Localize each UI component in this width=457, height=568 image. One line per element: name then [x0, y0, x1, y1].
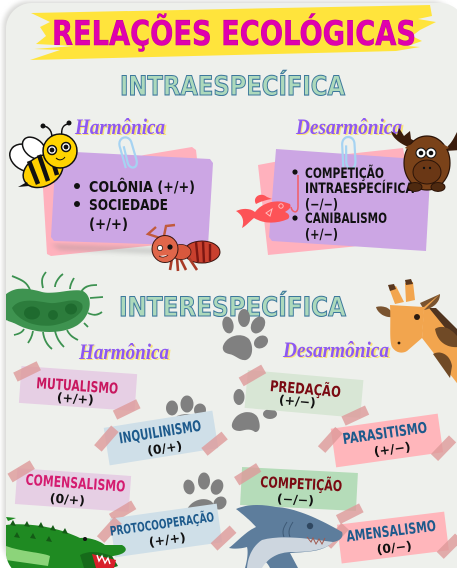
tag: amensalismo: [328, 512, 457, 564]
tag: protocooperação: PROTOCOOPERAÇÃO: [109, 509, 215, 540]
icon: shark: [229, 505, 343, 568]
tag: inquilinismo: INQUILINISMO: [118, 417, 202, 447]
panel: desarmônica intraespecífica: COMPETIÇÃO: [305, 165, 384, 182]
heading: harmônica (intra): Harmônica: [74, 114, 165, 139]
panel: harmônica intraespecífica: [42, 137, 213, 256]
tag: inquilinismo: [94, 410, 228, 466]
heading: desarmônica (inter): Desarmônica: [282, 337, 389, 362]
panel: desarmônica intraespecífica: CANIBALISMO: [305, 211, 387, 227]
heading: desarmônica (inter): [282, 341, 390, 358]
panel: desarmônica intraespecífica: (−/−): [305, 197, 338, 213]
tag: comensalismo: COMENSALISMO: [25, 471, 126, 496]
icon: fish: [236, 195, 291, 228]
icon: paw print top: [221, 309, 271, 360]
panel: harmônica intraespecífica: SOCIEDADE: [89, 196, 168, 214]
tag: parasitismo: (+/−): [373, 439, 411, 459]
tag: comensalismo: (0/+): [49, 490, 85, 508]
tag: protocooperação: [97, 504, 236, 558]
tag: competição: COMPETIÇÃO: [260, 472, 343, 495]
heading: harmônica (intra): [74, 118, 166, 135]
tag: competição: [232, 462, 366, 525]
icon: bacteria: [5, 272, 103, 349]
heading: desarmônica (intra): Desarmônica: [295, 114, 402, 139]
tag: predação: [238, 364, 370, 426]
tag: predação: (+/−): [278, 392, 316, 410]
icon: bee: [9, 120, 78, 188]
icon: paw print behind inquilinismo: [166, 396, 206, 416]
tag: predação: PREDAÇÃO: [269, 376, 342, 401]
panel: desarmônica intraespecífica: INTRAESPECÍFICA: [305, 180, 414, 197]
panel: harmônica intraespecífica: (+/+): [89, 215, 128, 233]
panel: desarmônica intraespecífica: (+/−): [305, 227, 338, 243]
icon: paperclip: [119, 137, 137, 168]
tag: comensalismo: [8, 460, 136, 518]
tag: amensalismo: (0/−): [376, 538, 413, 557]
tag: parasitismo: PARASITISMO: [342, 418, 428, 448]
title: [30, 5, 436, 60]
icon: paperclip: [341, 136, 356, 168]
tag: parasitismo: [318, 414, 456, 468]
icon: moose: [391, 128, 457, 192]
icon: ant: [148, 225, 220, 271]
icon: crocodile: [6, 517, 126, 568]
tag: mutualismo: (+/+): [56, 390, 94, 407]
heading: harmônica (inter): [78, 343, 170, 360]
heading: harmônica (intra): Harmônica: [75, 115, 167, 140]
tag: protocooperação: (+/+): [148, 529, 187, 549]
icon: paw print behind protocooperação: [183, 472, 226, 510]
heading: desarmônica (intra): Desarmônica: [296, 115, 404, 140]
icon: giraffe: [376, 279, 457, 387]
heading: intraespecífica: INTRAESPECÍFICA: [120, 70, 345, 102]
tag: mutualismo: MUTUALISMO: [36, 374, 119, 398]
panel: harmônica intraespecífica: COLÔNIA (+/+): [89, 177, 195, 196]
heading: desarmônica (intra): [296, 118, 404, 135]
heading: interespecífica: INTERESPECÍFICA: [119, 291, 346, 323]
tag: mutualismo: [10, 360, 143, 421]
heading: desarmônica (inter): Desarmônica: [283, 338, 391, 363]
heading: harmônica (inter): Harmônica: [79, 340, 171, 365]
panel: desarmônica intraespecífica: [258, 136, 431, 255]
icon: paw print under predação: [232, 389, 277, 432]
tag: competição: (−/−): [277, 491, 314, 508]
tag: inquilinismo: (0/+): [146, 438, 183, 458]
heading: harmônica (inter): Harmônica: [78, 339, 169, 364]
